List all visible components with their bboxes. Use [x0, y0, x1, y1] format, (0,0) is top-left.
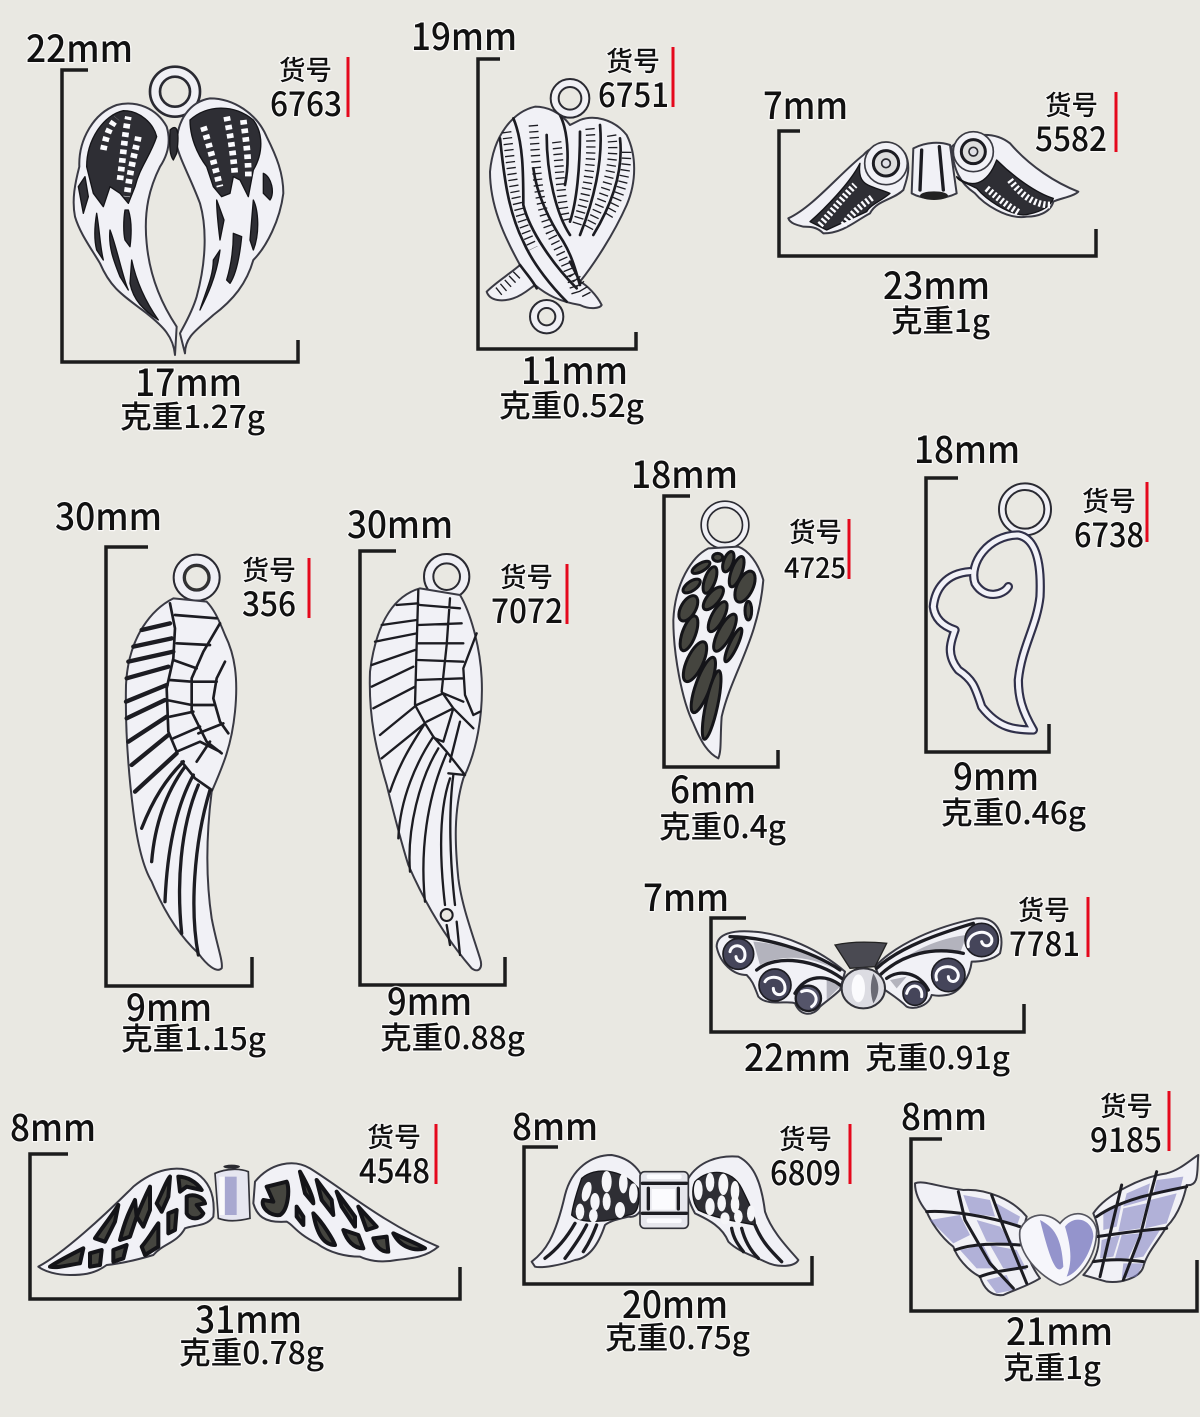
- charm 6763: heart wing pair with labels: [26, 19, 348, 437]
- bracket 4548: [30, 1154, 460, 1299]
- item number 4548: 4548: [359, 1145, 430, 1193]
- item number 7781: 7781: [1009, 918, 1080, 966]
- dimension labels 7072: 30mm: [347, 495, 453, 549]
- dimension labels 6738: 9mm: [953, 747, 1039, 801]
- dimension labels 6763: 17mm: [135, 353, 242, 407]
- dimension labels 7072: 9mm: [387, 972, 472, 1026]
- item number 6751: 6751: [598, 69, 669, 117]
- charm 6751: folded wings with labels: [411, 7, 673, 426]
- charm 4725: small pierced wing with labels: [631, 445, 849, 847]
- item number 4725: 货号: [789, 511, 842, 550]
- dimension labels 6809: [512, 1097, 750, 1358]
- dimension labels 6751: 克重0.52g: [499, 381, 644, 426]
- charm drawing 4548: [38, 1163, 438, 1275]
- dimension labels 6763: 22mm: [26, 19, 133, 73]
- item number 4548: 货号: [367, 1116, 421, 1155]
- dimension labels 6738: 18mm: [914, 420, 1020, 474]
- charm drawing 356: [126, 560, 236, 970]
- dimension labels 7781: [643, 868, 1010, 1082]
- dimension labels 356: 克重1.15g: [121, 1014, 266, 1059]
- bracket 6763: [62, 70, 298, 362]
- dimension labels 6738: 克重0.46g: [941, 788, 1086, 833]
- dimension labels 7781: 克重0.91g: [865, 1033, 1010, 1078]
- bracket 6738: [926, 478, 1049, 752]
- item number 7072: [491, 556, 567, 633]
- bracket 9185: [911, 1139, 1197, 1311]
- bracket 4725: [664, 496, 778, 767]
- item number 9185: 货号: [1100, 1085, 1153, 1124]
- item number 7781: [1009, 889, 1088, 966]
- dimension labels 6751: 19mm: [411, 7, 517, 61]
- charm drawing 6751: [487, 83, 634, 329]
- item number 9185: 9185: [1090, 1114, 1162, 1162]
- bracket 356: [106, 547, 252, 986]
- item number 5582: 货号: [1045, 84, 1098, 123]
- charm 6809: angel wings spacer with labels: [512, 1097, 850, 1358]
- item number 6809: [770, 1118, 850, 1195]
- bracket 6809: [524, 1147, 812, 1284]
- dimension labels 5582: 7mm: [763, 76, 848, 130]
- dimension labels 7781: 22mm: [744, 1028, 851, 1082]
- dimension labels 6738: [914, 420, 1086, 833]
- dimension labels 6751: [411, 7, 644, 426]
- charm drawing 9185: [915, 1155, 1198, 1295]
- dimension labels 356: 30mm: [55, 487, 162, 541]
- dimension labels 4725: 克重0.4g: [659, 802, 786, 847]
- item number 7781: 货号: [1018, 889, 1070, 928]
- dimension labels 4725: [631, 445, 786, 847]
- item number 356: [242, 549, 309, 626]
- bracket 5582: [779, 131, 1096, 256]
- charm drawing 7781: [717, 918, 1001, 1014]
- item number 6738: 6738: [1074, 509, 1144, 557]
- item number 6738: 货号: [1082, 480, 1136, 519]
- charm 9185: heart wings with labels: [901, 1085, 1198, 1388]
- item number 6763: [270, 49, 348, 126]
- dimension labels 5582: 23mm: [883, 256, 990, 310]
- item number 5582: [1035, 84, 1116, 161]
- dimension labels 4548: [10, 1098, 324, 1373]
- dimension labels 9185: 8mm: [901, 1087, 987, 1141]
- dimension labels 5582: 克重1g: [891, 296, 990, 341]
- dimension labels 6809: 克重0.75g: [605, 1313, 750, 1358]
- item number 6809: 货号: [779, 1118, 832, 1157]
- charm drawing 7072: [370, 559, 482, 970]
- charm drawing 6738: [933, 487, 1048, 730]
- dimension labels 7072: [347, 495, 525, 1058]
- charm 5582: bead spacer wings with labels: [763, 76, 1116, 341]
- dimension labels 6763: [26, 19, 265, 437]
- charm drawing 6763: [74, 72, 283, 355]
- item number 6809: 6809: [770, 1147, 841, 1195]
- dimension labels 6809: 20mm: [622, 1275, 728, 1329]
- item number 6738: [1074, 480, 1147, 557]
- item number 6751: [598, 40, 673, 117]
- dimension labels 9185: 21mm: [1006, 1302, 1113, 1356]
- item number 4725: [784, 511, 849, 587]
- item number 4548: [359, 1116, 436, 1193]
- item number 6763: 6763: [270, 78, 342, 126]
- item number 356: 货号: [242, 549, 296, 588]
- dimension labels 9185: 克重1g: [1003, 1343, 1101, 1388]
- item number 5582: 5582: [1035, 113, 1107, 161]
- bracket 7781: [711, 918, 1024, 1032]
- dimension labels 4548: 31mm: [195, 1290, 302, 1344]
- dimension labels 6809: 8mm: [512, 1097, 598, 1151]
- dimension labels 4548: 8mm: [10, 1098, 96, 1152]
- dimension labels 4548: 克重0.78g: [179, 1328, 324, 1373]
- item number 6763: 货号: [279, 49, 332, 88]
- item number 6751: 货号: [606, 40, 660, 79]
- dimension labels 356: [55, 487, 266, 1059]
- dimension labels 9185: [901, 1087, 1113, 1388]
- item number 356: 356: [242, 578, 296, 626]
- charm 356: long wing with labels: [55, 487, 309, 1059]
- dimension labels 6751: 11mm: [521, 341, 628, 395]
- dimension labels 4725: 18mm: [631, 445, 738, 499]
- item number 9185: [1090, 1085, 1169, 1162]
- charm drawing 6809: [532, 1155, 798, 1267]
- item number 7072: 货号: [500, 556, 553, 595]
- charm 4548: long pierced spacer wings with labels: [10, 1098, 460, 1373]
- item number 7072: 7072: [491, 585, 563, 633]
- dimension labels 5582: [763, 76, 990, 341]
- charm drawing 5582: [788, 132, 1078, 233]
- bracket 6751: [478, 59, 636, 349]
- charm 7072: long wing with hole and labels: [347, 495, 567, 1058]
- dimension labels 4725: 6mm: [670, 760, 756, 814]
- charm 7781: scroll butterfly wings with labels: [643, 868, 1088, 1082]
- charm drawing 4725: [673, 504, 763, 758]
- dimension labels 356: 9mm: [126, 978, 212, 1032]
- dimension labels 6763: 克重1.27g: [120, 392, 265, 437]
- dimension labels 7781: 7mm: [643, 868, 729, 922]
- item number 4725: 4725: [784, 547, 846, 587]
- bracket 7072: [360, 551, 505, 985]
- charm 6738: open outline wing with labels: [914, 420, 1147, 833]
- dimension labels 7072: 克重0.88g: [380, 1013, 525, 1058]
